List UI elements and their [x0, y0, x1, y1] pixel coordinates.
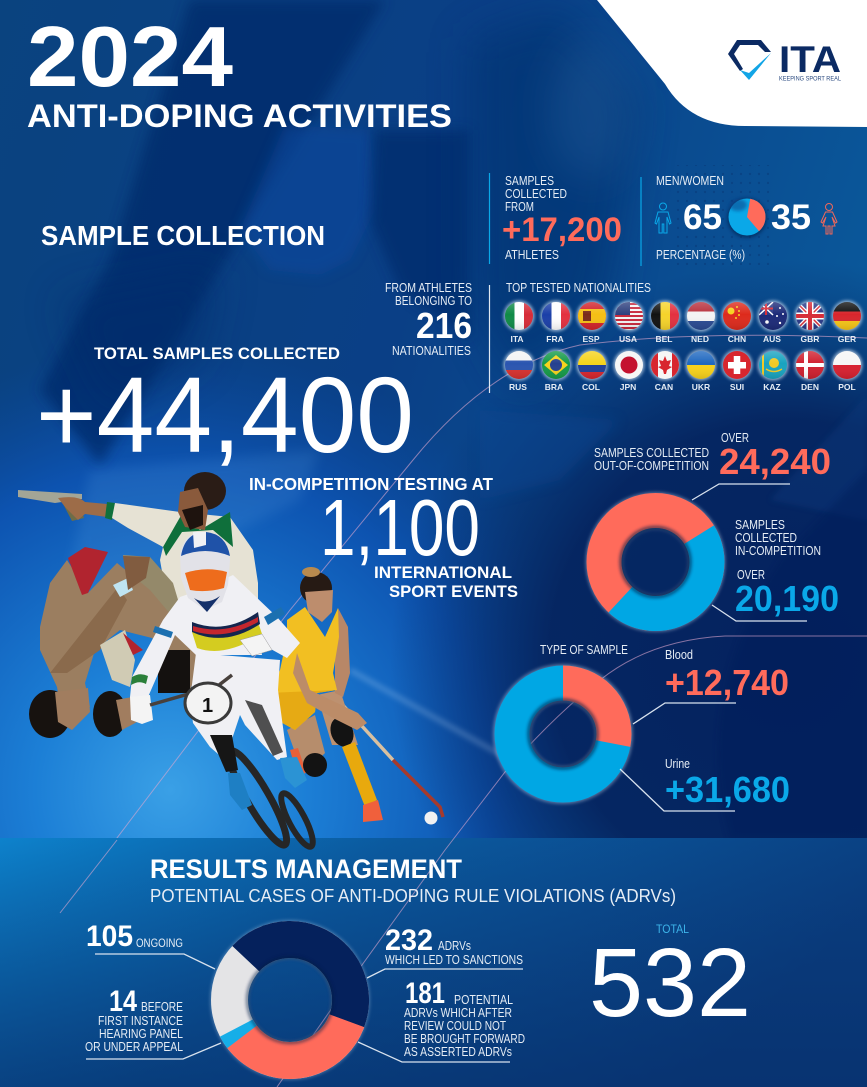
logo panel: [597, 0, 867, 127]
stat: nationalities: FROM ATHLETES: [385, 281, 472, 295]
callout: blood: Blood: [665, 648, 693, 662]
flag: Great Britain: GBR: [801, 334, 819, 344]
flag: Switzerland: SUI: [730, 382, 744, 392]
flag: France: FRA: [546, 334, 564, 344]
stat: total 532: TOTAL: [656, 922, 689, 936]
flag: Germany: GER: [838, 334, 856, 344]
callout: 14 before first instance: HEARING PANEL: [99, 1027, 183, 1041]
callout: in-competition: 20,190: [735, 578, 839, 619]
flag: Japan: [614, 350, 644, 392]
stat: total samples collected: TOTAL SAMPLES COLLECTED: [94, 344, 340, 363]
heading: sample collection: SAMPLE COLLECTION: [41, 220, 325, 251]
flag: Brazil: BRA: [545, 382, 563, 392]
flag: Colombia: COL: [582, 382, 600, 392]
label: type of sample: TYPE OF SAMPLE: [540, 643, 628, 657]
callout: 105 ongoing: ONGOING: [136, 938, 183, 950]
stat: in-competition testing: SPORT EVENTS: [389, 582, 518, 601]
chart: type of sample donut: [512, 683, 614, 785]
flag: USA: [614, 300, 644, 344]
callout: in-competition: OVER: [737, 568, 765, 582]
callout: urine: [620, 757, 790, 811]
callout: out-of-competition: OUT-OF-COMPETITION: [594, 459, 709, 473]
stat: in-competition testing: IN-COMPETITION TESTING AT: [249, 474, 493, 494]
heading: results management: [150, 854, 676, 906]
flag: Belgium: [650, 300, 680, 344]
callout: 105 ongoing: [86, 920, 215, 969]
callout: out-of-competition: OVER: [721, 431, 749, 445]
panel: athletes count: FROM: [505, 200, 534, 214]
callout: 232 ADRVs: 232: [385, 924, 433, 957]
title: [27, 10, 452, 134]
flag: Netherlands: [686, 300, 716, 344]
stat: in-competition testing: 1,100: [320, 483, 480, 572]
flag: France: [540, 300, 572, 344]
panel: men and women percentage: PERCENTAGE (%): [656, 248, 745, 262]
callout: in-competition: IN-COMPETITION: [735, 544, 821, 558]
stat: nationalities: 216: [416, 305, 472, 346]
flag: Spain: ESP: [582, 334, 600, 344]
figure: shooter: [18, 472, 258, 610]
panel: top tested nationalities: [490, 281, 862, 393]
panel: athletes count: SAMPLES: [505, 174, 554, 188]
panel: results management background: [0, 838, 867, 1087]
heading: results management: POTENTIAL CASES OF ANTI-DOPING RULE VIOLATIONS (ADRVs): [150, 885, 676, 906]
callout: 181 potential ADRVs: ADRVs WHICH AFTER: [404, 1006, 512, 1020]
flag: Poland: POL: [838, 382, 856, 392]
flag: Italy: [504, 300, 534, 344]
title: ANTI-DOPING ACTIVITIES: [27, 98, 452, 134]
callout: 232 ADRVs: ADRVs: [438, 939, 471, 953]
callout: 14 before first instance: 14: [109, 985, 137, 1018]
chart: out-of-competition vs in-competition donut: [585, 491, 726, 633]
icon: man: [655, 203, 671, 233]
callout: 232 ADRVs: [367, 924, 523, 978]
flag: Canada: [650, 350, 680, 392]
flag: Australia: [758, 300, 788, 344]
flag: USA: USA: [619, 334, 637, 344]
panel: athletes count: COLLECTED: [505, 187, 567, 201]
illustration: athletes collage: [18, 472, 443, 850]
stat: in-competition testing: [249, 474, 518, 601]
callout: 181 potential ADRVs: POTENTIAL: [454, 993, 513, 1007]
chart: results management donut: [204, 914, 376, 1086]
panel: athletes count: +17,200: [502, 211, 622, 249]
flag: China: [722, 300, 752, 344]
flag: Colombia: [576, 350, 608, 392]
callout: blood: +12,740: [665, 662, 789, 703]
figure: BMX rider: 1: [202, 695, 213, 717]
flag: Spain: [576, 300, 608, 344]
flag: Australia: AUS: [763, 334, 781, 344]
stat: total 532: 532: [589, 928, 751, 1037]
ITA wordmark: ITA: [779, 39, 841, 80]
flag: Kazakhstan: KAZ: [763, 382, 781, 392]
figure: BMX rider: [130, 532, 318, 850]
callout: out-of-competition: 24,240: [719, 441, 831, 482]
flag: Denmark: DEN: [801, 382, 819, 392]
callout: out-of-competition: [594, 431, 831, 500]
flag: Russia: RUS: [509, 382, 527, 392]
flag: China: CHN: [728, 334, 746, 344]
flag: Ukraine: UKR: [692, 382, 710, 392]
panel: athletes count: [490, 173, 622, 264]
callout: 14 before first instance: FIRST INSTANCE: [98, 1014, 183, 1028]
chart: men women pie: [727, 198, 767, 238]
callout: 14 before first instance: BEFORE: [141, 1000, 183, 1014]
flag: Ukraine: [686, 350, 716, 392]
callout: 14 before first instance: [85, 985, 221, 1059]
stat: total samples collected: +44,400: [36, 354, 414, 475]
flag: Brazil: [540, 350, 572, 392]
number: women 35: 35: [771, 198, 811, 237]
flag: Germany: [832, 300, 862, 344]
icon: ITA diamond: [728, 40, 771, 80]
callout: 14 before first instance: OR UNDER APPEAL: [85, 1040, 183, 1054]
flag: Japan: JPN: [620, 382, 636, 392]
figure: diver: [29, 547, 205, 738]
callout: 181 potential ADRVs: 181: [405, 977, 445, 1010]
panel: top tested nationalities: TOP TESTED NATIONALITIES: [506, 281, 651, 295]
stat: in-competition testing: INTERNATIONAL: [374, 563, 512, 582]
callout: urine: +31,680: [665, 769, 790, 810]
flag: Italy: ITA: [510, 334, 524, 344]
callout: urine: Urine: [665, 757, 690, 771]
callout: 181 potential ADRVs: [358, 977, 525, 1062]
number: men 65: 65: [683, 198, 722, 237]
callout: out-of-competition: SAMPLES COLLECTED: [594, 446, 709, 460]
callout: in-competition: SAMPLES: [735, 518, 785, 532]
flag: Netherlands: NED: [691, 334, 709, 344]
panel: athletes count: ATHLETES: [505, 248, 559, 262]
flag: Kazakhstan: [758, 350, 788, 392]
callout: 181 potential ADRVs: AS ASSERTED ADRVs: [404, 1045, 512, 1059]
figure: hockey player: [268, 567, 443, 824]
flag: Denmark: [794, 350, 826, 392]
flag: Switzerland: [722, 350, 752, 392]
heading: results management: RESULTS MANAGEMENT: [150, 854, 462, 884]
stat: nationalities: NATIONALITIES: [392, 344, 471, 358]
callout: 232 ADRVs: WHICH LED TO SANCTIONS: [385, 953, 523, 967]
callout: blood: [633, 648, 789, 724]
flag: Canada: CAN: [655, 382, 673, 392]
panel: men and women percentage: MEN/WOMEN: [656, 174, 724, 188]
stat: nationalities: BELONGING TO: [395, 294, 472, 308]
stat: nationalities: [385, 281, 472, 358]
flag: Belgium: BEL: [656, 334, 672, 344]
logo tagline: KEEPING SPORT REAL: [779, 76, 841, 82]
callout: 181 potential ADRVs: BE BROUGHT FORWARD: [404, 1032, 525, 1046]
title: 2024: [27, 10, 233, 105]
icon: woman: [821, 204, 837, 234]
callout: in-competition: [712, 518, 839, 621]
callout: 181 potential ADRVs: REVIEW COULD NOT: [404, 1019, 506, 1033]
callout: 105 ongoing: 105: [86, 920, 133, 953]
flag: Russia: [504, 350, 534, 392]
flag: Great Britain: [794, 300, 826, 344]
callout: in-competition: COLLECTED: [735, 531, 797, 545]
panel: men and women percentage: [641, 174, 837, 266]
flag: Poland: [832, 350, 862, 392]
